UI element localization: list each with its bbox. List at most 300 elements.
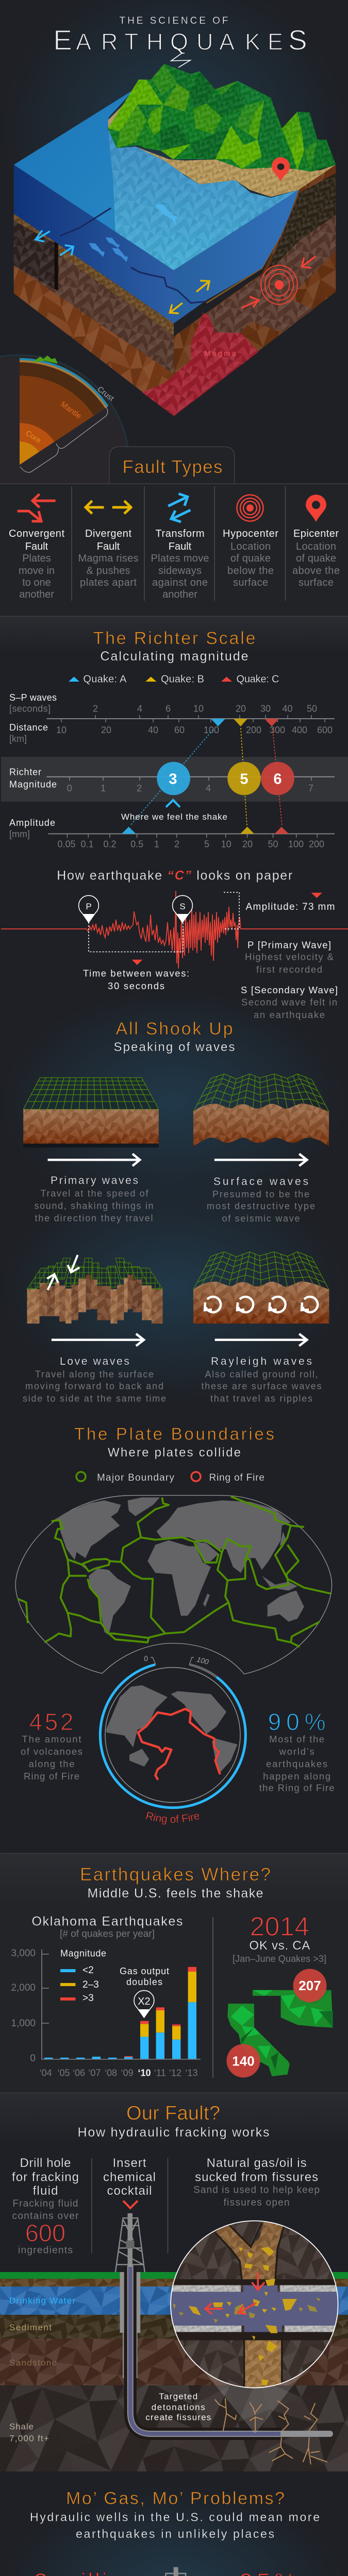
seafloor cracks	[60, 208, 205, 303]
left soil face	[14, 214, 174, 416]
heading: richter scale: Calculating magnitude	[100, 649, 248, 664]
magnifier cone	[198, 2365, 309, 2434]
column: epicenter: of quake	[296, 553, 336, 564]
axis: richter magnitude	[46, 777, 335, 781]
ring of fire curved label: Ring of Fire	[146, 1811, 200, 1825]
callout: S wave: Second wave felt in	[241, 996, 337, 1007]
axis numbers: seconds: 4	[137, 704, 142, 714]
axis numbers: magnitude: 6	[275, 783, 280, 793]
axis: amplitude	[48, 834, 335, 838]
annotation: gas output doubles: X2	[138, 1996, 151, 2007]
callout: P wave: first recorded	[256, 964, 322, 975]
axis numbers: distance: 300	[270, 725, 285, 735]
callout: targeted detonations: Targeted	[159, 2392, 197, 2401]
column: transform fault: against one	[152, 577, 208, 588]
column: chemical cocktail: Insert	[112, 2156, 146, 2170]
axis numbers: seconds: 20	[236, 704, 246, 714]
seismogram chart	[1, 891, 348, 1020]
legend: >3	[82, 1993, 94, 2004]
column: convergent fault: move in	[19, 565, 55, 577]
axis numbers: amplitude: 20	[242, 839, 253, 850]
column: transform fault: Fault	[169, 541, 192, 552]
axis numbers: distance: 100	[204, 725, 219, 735]
callout: amplitude: Amplitude: 73 mm	[245, 902, 335, 912]
annotation: gas output doubles: doubles	[126, 1977, 162, 1987]
callout: P wave: P [Primary Wave]	[247, 940, 331, 951]
heading tab	[109, 447, 235, 484]
axis numbers: seconds: 40	[282, 704, 293, 714]
block: love waves	[27, 1258, 163, 1324]
axis numbers: distance: 60	[174, 725, 185, 735]
layer labels: Shale	[9, 2421, 34, 2432]
axis: S-P and distance	[46, 715, 335, 722]
icon: hypocenter	[237, 495, 263, 521]
column: transform fault: Plates move	[151, 553, 209, 564]
text: rayleigh waves: that travel as ripples	[210, 1393, 312, 1403]
casing	[120, 2272, 140, 2378]
hero glow	[0, 0, 347, 283]
magnifier lens	[169, 2218, 340, 2391]
axis numbers: distance: 20	[101, 725, 111, 735]
icon: epicenter pin on land	[272, 157, 290, 181]
text: love waves: side to side at the same time	[23, 1393, 166, 1403]
legend	[60, 1948, 106, 2004]
text: love waves	[23, 1355, 166, 1403]
callout: S wave: an earthquake	[254, 1009, 325, 1020]
axis numbers: magnitude: 4	[206, 783, 211, 793]
axis numbers: amplitude: 2	[174, 839, 179, 850]
legend: boundaries: Ring of Fire	[209, 1472, 264, 1483]
column: natural gas: Natural gas/oil is	[207, 2156, 307, 2170]
icon: red chevron	[123, 2201, 138, 2208]
heading: mo gas: Hydraulic wells in the U.S. could mean more	[30, 2510, 320, 2523]
stat: 452 volcanoes: along the	[29, 1758, 74, 1769]
arrows: divergent fault (yellow)	[170, 281, 209, 313]
axis numbers: magnitude: 7	[308, 783, 313, 793]
richter section background fade	[0, 617, 348, 653]
layer: shale	[0, 2385, 348, 2471]
title: ARTHQUAKE	[76, 29, 283, 55]
axis numbers: distance: 40	[148, 725, 158, 735]
title: S	[288, 24, 307, 56]
waves section glows	[0, 989, 347, 1401]
text: love waves: Love waves	[60, 1355, 129, 1367]
heading: all shook up: Speaking of waves	[113, 1040, 235, 1054]
mountains and beach	[108, 64, 336, 197]
band	[0, 484, 348, 616]
ring scale labels: 100	[196, 1655, 210, 1666]
column: hypocenter	[223, 528, 278, 588]
column dividers	[92, 2158, 168, 2253]
icon: drilling rig	[155, 2567, 196, 2576]
chart title	[32, 1914, 183, 1940]
bar chart: 1,000	[11, 2018, 36, 2029]
year labels: ‘08	[105, 2068, 117, 2078]
text: rayleigh waves: these are surface waves	[201, 1381, 322, 1391]
fissures	[215, 2398, 327, 2464]
axis numbers: seconds: 6	[165, 704, 171, 714]
icon: hypocenter rings	[261, 265, 297, 304]
bubble: 140	[227, 2044, 260, 2077]
column dividers	[72, 486, 286, 601]
earth labels: Core	[24, 429, 43, 445]
ring scale labels: 0	[143, 1654, 149, 1663]
callout: P wave	[245, 940, 334, 975]
heading: plate boundaries	[74, 1425, 274, 1460]
california	[227, 2004, 290, 2076]
world map	[15, 1496, 332, 1674]
row labels: [seconds]	[9, 704, 51, 714]
legend: quakes: Quake: C	[236, 674, 279, 685]
block: primary waves	[23, 1078, 159, 1147]
axis numbers: amplitude: 0.1	[80, 839, 94, 850]
column: divergent fault: Fault	[97, 541, 120, 552]
callout: targeted detonations: detonations	[152, 2402, 205, 2412]
label: magma: Magma	[204, 349, 237, 358]
column: hypocenter: surface	[233, 577, 268, 588]
stat: 90 percent: happen along	[263, 1771, 330, 1782]
panel: fault types	[0, 447, 348, 617]
globe continents	[106, 1685, 238, 1774]
heading: plate boundaries: Where plates collide	[108, 1446, 241, 1460]
isometric earth block illustration	[14, 64, 336, 416]
text: surface waves: of seismic wave	[222, 1213, 300, 1224]
cement layers	[169, 2285, 241, 2292]
text: surface waves: most destructive type	[207, 1201, 315, 1211]
year labels: ‘04	[40, 2068, 52, 2078]
right soil face	[174, 165, 336, 416]
arrow: love	[52, 1334, 144, 1346]
lower fracture	[244, 2340, 282, 2390]
column: drill hole	[12, 2156, 79, 2256]
ground cross-section	[0, 2213, 348, 2471]
year labels: ‘12	[169, 2068, 181, 2078]
arrows on love block	[47, 1255, 79, 1290]
text: love waves: Travel along the surface	[35, 1369, 154, 1380]
column: convergent fault: to one	[22, 577, 51, 588]
year labels: ‘09	[121, 2068, 134, 2078]
axis numbers: distance: 600	[317, 725, 333, 735]
column: epicenter: surface	[299, 577, 334, 588]
tiny mountains on crust	[32, 355, 58, 364]
callout: targeted detonations: create fissures	[145, 2413, 211, 2422]
upper fracture	[216, 2221, 284, 2280]
stat: 90 percent: Most of the	[269, 1734, 324, 1744]
stat: 90 percent: earthquakes	[266, 1758, 327, 1769]
icon: lightning bolt under title	[171, 47, 190, 67]
column: transform fault: Transform	[156, 528, 204, 539]
column: divergent fault: Divergent	[85, 528, 131, 539]
icon: transform arrows	[168, 494, 190, 522]
callout: S wave	[241, 985, 338, 1020]
axis numbers: seconds: 30	[260, 704, 271, 714]
axis numbers: amplitude: 1	[154, 839, 159, 850]
mo gas section background	[0, 2471, 348, 2576]
column: drill hole: Drill hole	[20, 2156, 71, 2170]
axis numbers: magnitude: 2	[137, 783, 142, 793]
axis numbers: amplitude	[57, 839, 324, 850]
stat: 452 volcanoes: of volcanoes	[21, 1746, 82, 1757]
earth labels: Mantle	[59, 400, 83, 420]
heading: all shook up: All Shook Up	[115, 1019, 233, 1039]
magnitude bubbles	[157, 762, 294, 795]
stat: 90 percent: world’s	[279, 1746, 314, 1757]
ring of fire line	[138, 1709, 220, 1779]
fish	[89, 205, 177, 262]
block: rayleigh waves	[193, 1252, 329, 1324]
text: surface waves: Surface waves	[213, 1176, 308, 1188]
column: convergent fault: Plates	[22, 553, 51, 564]
column: chemical cocktail	[103, 2156, 156, 2198]
column: hypocenter: Location	[230, 541, 271, 552]
axis numbers: amplitude: 200	[309, 839, 324, 850]
year labels	[40, 2068, 198, 2078]
magma pocket	[142, 313, 259, 416]
column: epicenter: above the	[292, 565, 340, 577]
year labels: ‘11	[154, 2068, 166, 2078]
heading: our fault: How hydraulic fracking works	[77, 2125, 269, 2140]
wave trace	[1, 891, 348, 969]
column: divergent fault	[78, 528, 138, 588]
drilling rig	[115, 2213, 145, 2272]
bars	[44, 1967, 196, 2059]
year labels: ‘13	[185, 2068, 198, 2078]
column: drill hole: 600	[25, 2219, 65, 2247]
annotation: gas output doubles	[120, 1966, 169, 2018]
column: hypocenter: of quake	[230, 553, 271, 564]
dotted connector lines	[131, 728, 282, 826]
stat: 452 volcanoes: Ring of Fire	[24, 1771, 79, 1782]
column: chemical cocktail: chemical	[103, 2170, 156, 2184]
axis numbers: seconds: 2	[93, 704, 98, 714]
callout: time between waves	[83, 960, 189, 991]
legend: <2	[82, 1965, 94, 1976]
column: epicenter: Epicenter	[293, 528, 339, 539]
plate boundaries	[18, 1497, 330, 1647]
heading: our fault	[77, 2103, 269, 2140]
ocean right face	[174, 190, 299, 324]
legend: 2–3	[82, 1979, 99, 1990]
axis numbers: distance: 10	[56, 725, 67, 735]
magnitude bubbles: 5	[240, 771, 248, 787]
column: convergent fault: Convergent	[9, 528, 64, 539]
arrow: rayleigh	[215, 1334, 307, 1346]
axis numbers: amplitude: 50	[268, 839, 278, 850]
layer labels: Drinking Water	[9, 2296, 75, 2306]
outer faint sphere	[0, 354, 129, 483]
stat: 452 volcanoes: The amount	[22, 1734, 81, 1744]
stat: 452 volcanoes	[21, 1708, 82, 1782]
axis numbers: magnitude: 1	[101, 783, 106, 793]
text: primary waves	[34, 1175, 154, 1224]
layer labels: 7,000 ft+	[9, 2433, 49, 2443]
year labels: ‘05	[57, 2068, 70, 2078]
bar chart: 0	[30, 2053, 36, 2064]
column: transform fault	[151, 528, 209, 600]
stat: 2014 OK vs CA: 2014	[250, 1912, 309, 1942]
legend: Magnitude	[60, 1948, 106, 1958]
heading: mo gas: Mo’ Gas, Mo’ Problems?	[66, 2488, 285, 2508]
column: divergent fault: Magma rises	[78, 553, 138, 564]
axis numbers: seconds	[93, 704, 317, 714]
legend: quakes: Quake: A	[83, 674, 127, 685]
axis numbers: amplitude: 100	[288, 839, 304, 850]
undersea cliff	[108, 128, 299, 270]
axis numbers: magnitude: 5	[241, 783, 246, 793]
chart title: [# of quakes per year]	[60, 1929, 155, 1940]
column: divergent fault: plates apart	[80, 577, 137, 588]
map: oklahoma and california	[227, 1990, 333, 2076]
heading: all shook up	[113, 1019, 235, 1054]
row labels: Distance	[9, 722, 48, 733]
bubble: 140: 140	[232, 2054, 255, 2069]
legend: boundaries: Major Boundary	[97, 1472, 174, 1483]
bar chart: 3,000	[11, 1948, 36, 1959]
arrow: surface	[214, 1154, 307, 1166]
layer: topsoil	[0, 2279, 348, 2286]
heading: plate boundaries: The Plate Boundaries	[74, 1425, 274, 1444]
earth labels: Crust	[95, 385, 116, 403]
magnitude band	[1, 757, 348, 802]
magnitude bubbles: 3	[169, 771, 177, 787]
fracking section background fade	[0, 2093, 348, 2144]
stat: 90 percent	[259, 1708, 335, 1793]
layer labels	[9, 2296, 75, 2443]
column: drill hole: for fracking	[12, 2170, 79, 2184]
axis numbers: distance: 200	[246, 725, 261, 735]
axis numbers: amplitude: 10	[221, 839, 231, 850]
chart title: Oklahoma Earthquakes	[32, 1914, 183, 1929]
stat: 452 volcanoes: 452	[29, 1708, 73, 1735]
axis numbers: amplitude: 0.05	[57, 839, 76, 850]
pin: P	[79, 895, 98, 922]
annotation: gas output doubles: Gas output	[120, 1966, 169, 1976]
text: primary waves: sound, shaking things in	[34, 1201, 154, 1211]
column: natural gas	[193, 2156, 320, 2208]
ocean top surface	[14, 89, 174, 270]
red flow arrows	[205, 2273, 264, 2314]
wave block illustrations	[23, 1074, 329, 1346]
column: divergent fault: & pushes	[87, 565, 130, 577]
callout: time between waves: 30 seconds	[108, 980, 164, 991]
heading: richter scale	[93, 629, 256, 664]
axis numbers: amplitude: 0.2	[103, 839, 117, 850]
title: THE SCIENCE OF	[120, 15, 228, 26]
column: drill hole: contains over	[12, 2211, 79, 2222]
column: chemical cocktail: cocktail	[107, 2184, 152, 2198]
earth cross-section	[0, 354, 129, 483]
text: rayleigh waves: Also called ground roll,	[205, 1369, 318, 1380]
richter nomogram	[1, 692, 348, 850]
column divider	[212, 1917, 213, 2078]
stat: 90 percent: the Ring of Fire	[259, 1783, 335, 1793]
stat: 2014 OK vs CA: OK vs. CA	[249, 1939, 310, 1953]
stat: 90 percent: 90%	[268, 1708, 326, 1735]
chevron and shake note	[121, 800, 227, 822]
pin: S	[173, 895, 192, 922]
column: drill hole: ingredients	[18, 2245, 73, 2256]
text: rayleigh waves	[201, 1355, 322, 1403]
arrow: primary	[48, 1154, 140, 1166]
row labels: Richter	[9, 767, 41, 777]
text: primary waves: the direction they travel	[35, 1213, 153, 1224]
column: natural gas: Sand is used to help keep	[193, 2184, 320, 2196]
legend: boundaries	[76, 1472, 264, 1483]
column: hypocenter: below the	[227, 565, 274, 577]
column: natural gas: sucked from fissures	[195, 2170, 318, 2184]
column: convergent fault: another	[19, 589, 54, 600]
bubble: 207: 207	[299, 1978, 321, 1993]
year labels: ‘10	[138, 2068, 151, 2078]
column: hypocenter: Hypocenter	[223, 528, 278, 539]
axis numbers: magnitude: 3	[171, 783, 176, 793]
row labels: [km]	[9, 734, 27, 744]
callout: P wave: Highest velocity &	[245, 951, 334, 962]
heading: mo gas	[30, 2488, 320, 2540]
layer labels: Sediment	[9, 2323, 52, 2332]
axis numbers: seconds: 50	[307, 704, 317, 714]
bubble: 207	[293, 1969, 327, 2002]
panel: earthquakes where: Middle U.S. feels the shake	[88, 1886, 263, 1901]
progress ring	[100, 1657, 245, 1808]
heading: our fault: Our Fault?	[126, 2103, 220, 2124]
axis numbers: distance	[56, 725, 333, 735]
text: love waves: moving forward to back and	[25, 1381, 163, 1391]
inner globe ring	[105, 1667, 240, 1802]
heading: Earthquakes Where?	[80, 1865, 271, 1885]
column: drill hole: fluid	[33, 2184, 58, 2198]
text: surface waves	[207, 1176, 315, 1224]
text: primary waves: Primary waves	[51, 1175, 138, 1187]
icons: rayleigh rolling arrows	[205, 1297, 318, 1312]
dotted guides	[89, 892, 239, 952]
column: epicenter: Location	[296, 541, 336, 552]
callout: targeted detonations	[145, 2392, 211, 2422]
layer: sediment	[0, 2315, 348, 2338]
ocean left face	[14, 165, 174, 324]
layer: drinking water	[0, 2286, 348, 2315]
layer: grass	[0, 2272, 348, 2279]
oklahoma	[253, 1990, 333, 2028]
column: epicenter	[292, 528, 340, 588]
axis numbers: amplitude: 0.5	[130, 839, 143, 850]
wedge layers	[20, 358, 109, 465]
legend: quakes	[69, 674, 279, 685]
axis markers	[122, 719, 289, 834]
legend: quakes: Quake: B	[161, 674, 204, 685]
heading: Fault Types	[123, 457, 223, 477]
axis numbers: seconds: 10	[193, 704, 204, 714]
year labels: ‘06	[73, 2068, 85, 2078]
axis numbers: distance: 400	[292, 725, 307, 735]
icon: epicenter	[306, 495, 326, 522]
ring scale labels	[143, 1654, 210, 1666]
lens rock	[169, 2218, 340, 2391]
pin: P: P	[86, 902, 92, 911]
earth labels	[24, 385, 116, 445]
text: rayleigh waves: Rayleigh waves	[211, 1355, 312, 1367]
column: drill hole: Fracking fluid	[12, 2198, 78, 2209]
row labels: [mm]	[9, 829, 30, 839]
ring of fire globe	[99, 1654, 247, 1825]
row labels	[9, 692, 57, 839]
arrows: transform fault (blue)	[36, 230, 73, 256]
axis numbers: amplitude: 5	[204, 839, 209, 850]
lens rim	[171, 2221, 338, 2388]
callout: S wave: S [Secondary Wave]	[241, 985, 338, 995]
layer: sandstone	[0, 2338, 348, 2385]
icon: convergent arrows	[18, 494, 56, 521]
